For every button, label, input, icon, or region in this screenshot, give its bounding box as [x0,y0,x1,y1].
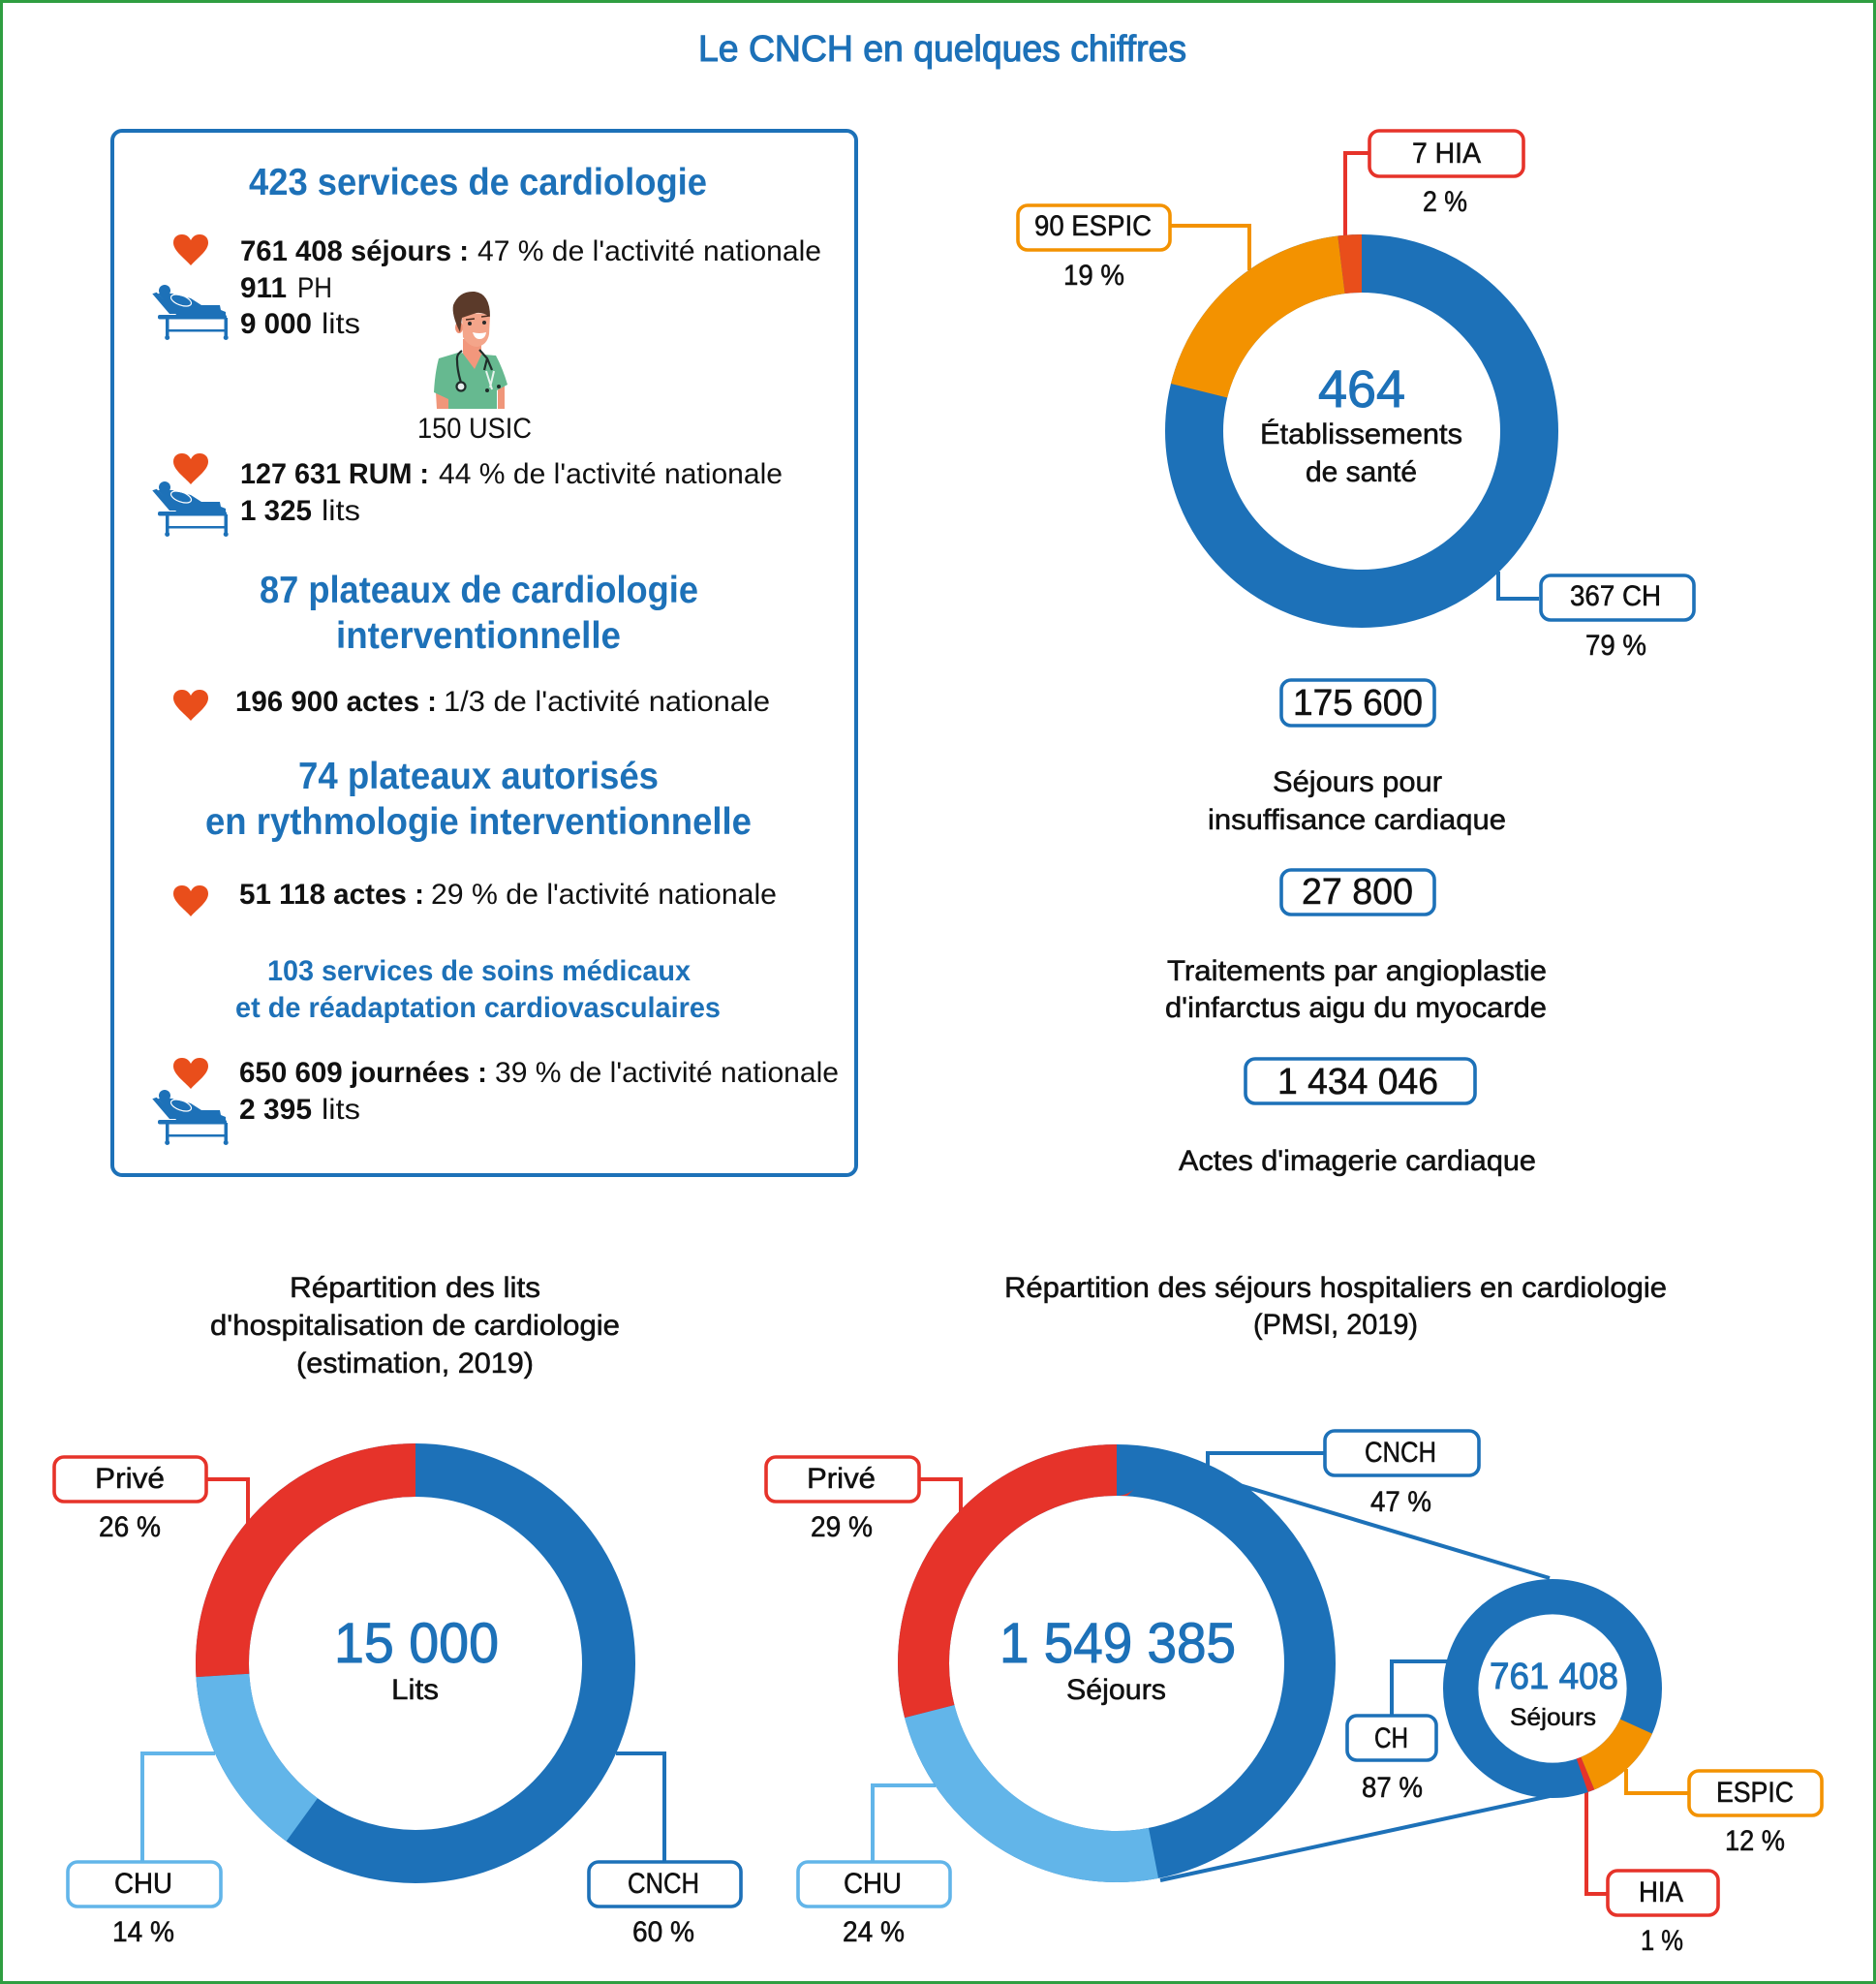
heading: 74 plateaux: en rythmologie interventionnelle [205,801,752,843]
chart: répartition des lits donut [54,1457,741,1948]
label: HIA: 2 % [1423,186,1467,218]
donut ring [223,1471,608,1856]
label: ESPIC [1689,1771,1822,1857]
heading: 74 plateaux [205,756,752,843]
stat: journées [239,1057,839,1089]
label: CHU: 14 % [112,1916,174,1948]
label: USIC: 150 USIC [417,413,532,445]
center value: 464 [1318,360,1405,418]
chart: établissements de santé donut [1018,131,1694,662]
label: CH: 79 % [1585,630,1646,662]
stat: actes rythmologie: 29 % de l'activité nationale [431,879,777,911]
label: Privé: Privé [807,1463,876,1495]
stat: séjours insuffisance cardiaque [1208,680,1506,836]
panel: activity of cardiology services [112,131,856,1175]
heading: 87 plateaux [260,570,698,657]
stat: séjours: 47 % de l'activité nationale [477,235,821,267]
stat: imagerie cardiaque [1179,1059,1536,1177]
center value [1000,1612,1236,1706]
chart: détail des séjours CNCH donut [1347,1596,1822,1957]
center value: Établissements [1260,418,1462,450]
icon: heart [173,234,208,265]
label: ESPIC: 12 % [1725,1825,1785,1857]
icon: heart [173,690,208,721]
stat: séjours insuffisance cardiaque: insuffisance cardiaque [1208,804,1506,836]
icon: bed [152,285,229,340]
label: Privé [54,1457,206,1543]
center value: de santé [1306,456,1417,488]
label: CNCH [1325,1431,1479,1518]
connectors [142,1479,664,1861]
stat: angioplasties [1165,870,1547,1024]
heading: répartition des séjours: Répartition des séjours hospitaliers en cardiologie [1004,1272,1667,1304]
heading: 87 plateaux: interventionnelle [336,615,621,657]
stat: actes: 1/3 de l'activité nationale [444,686,770,718]
label: CNCH: CNCH [1365,1437,1436,1469]
heading: 87 plateaux: 87 plateaux de cardiologie [260,570,698,611]
center value: Séjours [1066,1674,1166,1706]
label: ESPIC [1018,205,1170,292]
heading: répartition des séjours: (PMSI, 2019) [1253,1309,1418,1341]
label: CNCH: CNCH [628,1868,699,1900]
stat: actes [235,686,770,718]
icon: bed [152,1090,229,1145]
stat: RUM: 127 631 RUM : [240,458,429,490]
stat: angioplasties: 27 800 [1302,872,1413,913]
stat: imagerie cardiaque: 1 434 046 [1277,1062,1438,1102]
label: CNCH: 60 % [632,1916,694,1948]
stat: lits: 2 395 [239,1094,312,1126]
zoom lines to detail donut [1160,1482,1550,1880]
stat: PH [240,272,332,304]
icon: heart [173,453,208,484]
label: ESPIC: 19 % [1063,260,1124,292]
heading: répartition des lits: (estimation, 2019) [296,1348,534,1380]
stat: actes rythmologie: 51 118 actes : [239,879,424,911]
label: Privé: 26 % [99,1511,161,1543]
stat: actes: 196 900 actes : [235,686,437,718]
stat: lits [240,495,360,527]
stat: RUM [240,458,783,490]
center value: Lits [391,1674,439,1706]
center value: 1 549 385 [1000,1612,1236,1675]
label: CHU [798,1862,950,1948]
label: CH: 87 % [1362,1772,1423,1804]
heading: répartition des lits [210,1272,620,1380]
heading: 74 plateaux: 74 plateaux autorisés [298,756,659,797]
stat: actes rythmologie [239,879,777,911]
stat: séjours insuffisance cardiaque: Séjours pour [1273,766,1442,798]
stat: lits [240,308,360,340]
stat: journées: 650 609 journées : [239,1057,487,1089]
stat: séjours [240,235,821,267]
stat: lits: lits [322,308,360,340]
icon: bed [152,481,229,537]
connectors [873,1453,1324,1861]
label: CNCH [589,1862,741,1948]
donut ring [1461,1596,1645,1781]
stat: lits: lits [322,1094,360,1126]
icon: heart [173,885,208,916]
connectors [1392,1661,1688,1894]
title: Le CNCH en quelques chiffres [698,29,1186,70]
heading: répartition des lits: d'hospitalisation de cardiologie [210,1310,620,1342]
label: CHU: CHU [114,1868,172,1900]
stat: séjours: 761 408 séjours : [240,235,469,267]
center value: 761 408 [1490,1657,1618,1697]
stat: lits: 9 000 [240,308,312,340]
icon: doctor [434,292,507,409]
label: CH: 367 CH [1570,580,1661,612]
stat: PH: PH [297,272,332,304]
label: HIA: HIA [1639,1876,1683,1908]
label: CH [1347,1716,1436,1804]
stat: PH: 911 [240,272,287,304]
stat: lits [239,1094,360,1126]
donut ring [1194,264,1529,599]
label: HIA [1608,1871,1718,1957]
heading: 103 services: et de réadaptation cardiovasculaires [235,992,721,1024]
chart: répartition des séjours donut [766,1431,1550,1948]
label: HIA: 7 HIA [1412,138,1481,170]
center value: Séjours [1510,1704,1596,1731]
stat: angioplasties: d'infarctus aigu du myocarde [1165,992,1547,1024]
label: CNCH: 47 % [1370,1486,1431,1518]
stat: angioplasties: Traitements par angioplastie [1167,955,1547,987]
heading: 103 services: 103 services de soins médicaux [267,955,691,987]
icon: heart [173,1058,208,1089]
label: ESPIC: 90 ESPIC [1034,210,1152,242]
label: CHU [68,1862,221,1948]
label: CH [1541,575,1694,662]
label: Privé: 29 % [811,1511,873,1543]
label: Privé [766,1457,919,1543]
stat: lits: 1 325 [240,495,312,527]
center value [334,1612,499,1706]
heading: 103 services [235,955,721,1024]
label: Privé: Privé [95,1463,165,1495]
label: HIA: 1 % [1641,1925,1683,1957]
connectors [1171,153,1539,599]
heading: répartition des lits: Répartition des lits [290,1272,540,1304]
label: ESPIC: ESPIC [1716,1777,1794,1809]
label: CHU: CHU [844,1868,902,1900]
label: CH: CH [1374,1722,1408,1754]
stat: RUM: 44 % de l'activité nationale [439,458,783,490]
label: HIA [1369,131,1523,218]
center value [1260,360,1462,488]
center value: 15 000 [334,1612,499,1675]
heading: répartition des séjours [1004,1272,1667,1341]
stat: journées: 39 % de l'activité nationale [495,1057,839,1089]
stat: imagerie cardiaque: Actes d'imagerie cardiaque [1179,1145,1536,1177]
donut ring [924,1471,1309,1856]
panel frame [112,131,856,1175]
stat: séjours insuffisance cardiaque: 175 600 [1293,683,1423,724]
center value [1490,1657,1618,1731]
heading: 423 services: 423 services de cardiologie [249,162,707,203]
stat: lits: lits [322,495,360,527]
label: CHU: 24 % [843,1916,905,1948]
